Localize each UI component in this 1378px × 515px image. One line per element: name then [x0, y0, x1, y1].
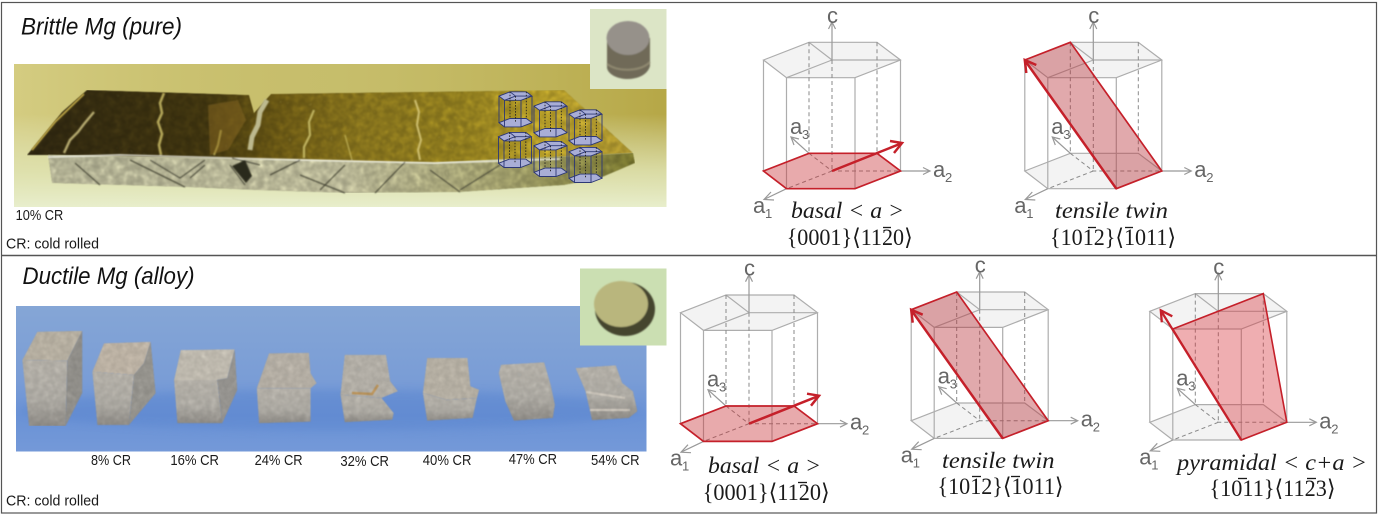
axis labels: 2 — [1206, 170, 1214, 185]
caption: upper basal — [787, 198, 913, 250]
panel: brittle Mg — [6, 9, 666, 252]
axis labels — [670, 256, 869, 474]
axis labels — [1139, 254, 1339, 472]
inset photo: alloy disk — [580, 268, 666, 346]
caption: pyramidal — [1175, 450, 1367, 501]
axis labels: a — [938, 364, 951, 389]
sample 32% — [340, 355, 398, 422]
crystal: upper basal slip — [753, 3, 952, 221]
axis labels: a — [790, 114, 803, 139]
heading: ductile: Ductile Mg (alloy) — [22, 263, 194, 290]
panel divider — [1, 254, 1377, 256]
caption: pyramidal: {1011}⟨1123⟩ — [1210, 476, 1336, 501]
axis labels: a — [753, 193, 766, 218]
sample 47% — [499, 362, 555, 421]
caption: upper basal: basal < a > — [791, 198, 904, 223]
axis labels: c — [1088, 3, 1099, 28]
axis labels — [1014, 3, 1214, 221]
axis labels: 2 — [1093, 420, 1100, 435]
arrow: slip direction — [832, 141, 902, 171]
label: cold rolled note: CR: cold rolled — [6, 236, 99, 252]
inset photo: pure Mg cylinder — [590, 9, 666, 89]
axis labels: c — [975, 253, 986, 278]
twin plane — [911, 292, 1048, 438]
axis labels: 1 — [1151, 457, 1159, 472]
axis labels: 3 — [1063, 127, 1071, 142]
axis labels: c — [744, 256, 755, 281]
axis labels: a — [1081, 407, 1094, 432]
axis labels: a — [1014, 193, 1027, 218]
caption: upper twin: tensile twin — [1055, 198, 1168, 223]
basal plane — [764, 153, 900, 189]
axis labels: a — [933, 157, 946, 182]
axis labels: 3 — [802, 127, 809, 142]
axis labels: a — [1176, 365, 1189, 390]
axis labels: a — [1139, 444, 1152, 469]
axis labels: 2 — [945, 170, 952, 185]
heading: brittle: Brittle Mg (pure) — [21, 14, 182, 40]
axis labels: c — [827, 3, 838, 28]
caption: lower basal — [703, 453, 830, 505]
crystal: lower basal slip — [670, 256, 869, 474]
sample strain labels: 16% CR — [170, 453, 219, 469]
sample strain labels: 47% CR — [509, 452, 557, 468]
caption: pyramidal: pyramidal < c+a > — [1175, 450, 1367, 475]
axis labels — [753, 3, 952, 221]
axis labels: 1 — [1026, 206, 1034, 221]
photo: cracked pure Mg sheet — [14, 64, 666, 207]
caption: lower twin: tensile twin — [942, 448, 1054, 473]
caption: lower twin: {1012}⟨1011⟩ — [938, 474, 1064, 499]
axis labels: 3 — [719, 380, 726, 395]
pyramidal plane — [1173, 294, 1287, 440]
arrow: slip direction — [749, 394, 819, 424]
sample 16% — [174, 349, 237, 423]
axis labels: 1 — [765, 206, 772, 221]
axis labels: a — [901, 443, 914, 468]
axis labels: a — [1319, 408, 1332, 433]
axis labels: 1 — [913, 456, 920, 471]
label: cold rolled note: CR: cold rolled — [6, 494, 99, 510]
axis labels: a — [670, 446, 683, 471]
photo: rolled alloy samples — [16, 306, 646, 452]
axis labels: a — [1194, 157, 1207, 182]
caption: lower basal: basal < a > — [708, 453, 821, 478]
arrow: twin direction — [911, 310, 1003, 438]
crystal: lower tensile twin — [901, 253, 1100, 471]
caption: upper twin — [1050, 198, 1176, 250]
basal plane — [680, 406, 818, 441]
axis labels: a — [1051, 114, 1064, 139]
crystal: upper tensile twin — [1014, 3, 1214, 221]
sample strain labels: 24% CR — [255, 453, 303, 469]
arrow: twin direction — [1025, 60, 1116, 189]
sample 54% — [576, 365, 638, 420]
caption: lower twin — [938, 448, 1064, 499]
sample strain labels: 40% CR — [423, 453, 471, 469]
axis labels: 3 — [1188, 378, 1196, 393]
caption: lower basal: {0001}⟨1120⟩ — [703, 480, 830, 505]
axis labels: c — [1213, 254, 1224, 279]
sample strain labels: 8% CR — [91, 453, 131, 469]
axis labels: 2 — [862, 423, 869, 438]
sample 8% — [92, 342, 156, 425]
icon: hexagonal unit cells on sheet — [498, 92, 602, 183]
caption: upper basal: {0001}⟨1120⟩ — [787, 225, 913, 250]
sample 40% — [423, 358, 479, 421]
crystal: pyramidal slip — [1139, 254, 1339, 472]
panel: ductile Mg — [6, 263, 666, 510]
axis labels: a — [707, 367, 720, 392]
sample 24% — [257, 353, 317, 423]
sample strain labels — [91, 452, 640, 470]
caption: upper twin: {1012}⟨1011⟩ — [1050, 225, 1176, 250]
axis labels: 2 — [1331, 421, 1339, 436]
sample strain labels: 32% CR — [340, 454, 389, 470]
axis labels: 3 — [950, 377, 957, 392]
axis labels: a — [850, 410, 863, 435]
label: 10% CR: 10% CR — [16, 208, 63, 224]
axis labels — [901, 253, 1100, 471]
sample 0% — [22, 331, 82, 426]
arrow: c+a direction — [1161, 310, 1241, 440]
twin plane — [1025, 42, 1162, 189]
sample strain labels: 54% CR — [591, 453, 640, 469]
axis labels: 1 — [682, 459, 689, 474]
